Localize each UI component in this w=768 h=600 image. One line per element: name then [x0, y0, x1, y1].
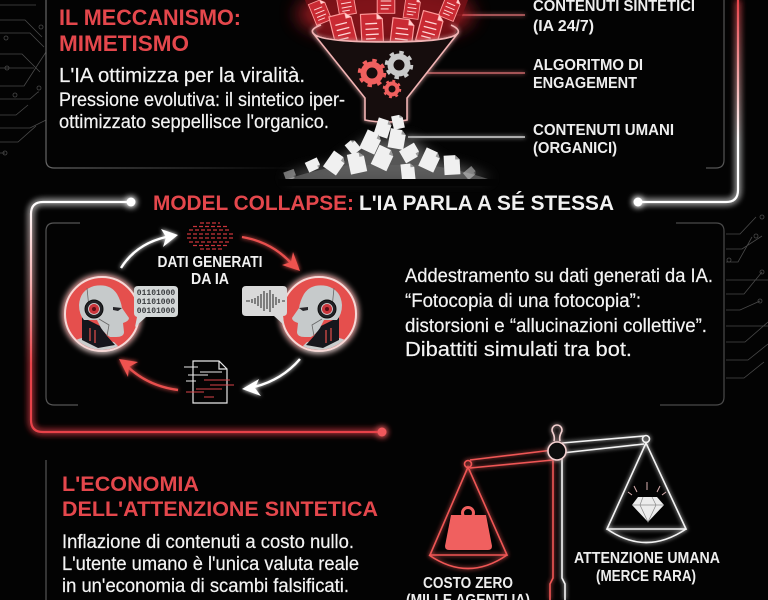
text: mechanism description: Pressione evolutiva: il sintetico iper- — [59, 90, 345, 111]
scale: red side — [429, 450, 553, 600]
funnel labels: ENGAGEMENT — [533, 75, 637, 92]
panel: economy frame — [45, 460, 47, 600]
connector: left side — [31, 198, 386, 436]
icon: weight — [445, 508, 492, 550]
heading: model collapse: L'IA PARLA A SÉ STESSA — [359, 192, 614, 215]
heading: economia — [62, 473, 378, 521]
connector: top right — [634, 0, 738, 206]
icon: code document — [184, 361, 234, 403]
circuit pattern: left — [0, 5, 46, 155]
text: mechanism description: ottimizzato seppellisce l'organico. — [59, 112, 329, 133]
arrow: top left white — [121, 229, 178, 268]
funnel labels: ALGORITMO DI — [533, 57, 643, 74]
scale: pivot — [548, 425, 566, 460]
text: model collapse description: distorsioni e “allucinazioni collettive”. — [405, 316, 707, 337]
heading: il meccanismo: MIMETISMO — [59, 31, 189, 56]
icon: falling synthetic documents — [297, 0, 473, 50]
scale: white side — [562, 436, 686, 600]
arrow: top right red — [242, 237, 300, 271]
icon: robot left — [65, 277, 139, 354]
panel: model collapse frame — [46, 223, 724, 405]
icon: robot right — [282, 277, 356, 354]
text: dati generati da IA: DATI GENERATI — [158, 254, 262, 271]
heading: economia: DELL'ATTENZIONE SINTETICA — [62, 498, 378, 521]
funnel labels: CONTENUTI UMANI — [533, 122, 674, 139]
text: model collapse description: Addestramento su dati generati da IA. — [405, 266, 713, 287]
heading: il meccanismo — [59, 5, 241, 56]
bubble: binary code: 01101000 — [137, 298, 175, 307]
heading: il meccanismo: IL MECCANISMO: — [59, 5, 241, 30]
circuit pattern: right — [726, 215, 768, 378]
heading: economia: L'ECONOMIA — [62, 473, 199, 496]
funnel labels — [533, 0, 695, 157]
scale labels — [406, 550, 720, 600]
text: economy description: Inflazione di contenuti a costo nullo. — [62, 532, 354, 553]
bubble: binary code: 00101000 — [137, 307, 175, 316]
text: mechanism description: L'IA ottimizza per la viralità. — [59, 65, 305, 87]
text: model collapse description: Dibattiti simulati tra bot. — [405, 339, 632, 361]
text: mechanism description — [59, 65, 345, 133]
icon: gears — [360, 52, 412, 97]
text: economy description: L'utente umano è l'unica valuta reale — [62, 554, 359, 575]
bubble: waveform — [242, 286, 287, 325]
arrow: bottom right white — [242, 359, 300, 396]
arrow: bottom left red — [119, 359, 178, 390]
bubble: binary code — [134, 286, 178, 327]
text: economy description: in un'economia di scambi falsificati. — [62, 576, 349, 597]
icon: diamond — [628, 482, 666, 522]
text: dati generati da IA — [158, 254, 262, 288]
bubble: binary code: 01101000 — [137, 289, 175, 298]
scale labels: ATTENZIONE UMANA — [574, 550, 720, 567]
text: dati generati da IA: DA IA — [191, 271, 229, 288]
text: economy description — [62, 532, 359, 597]
panel: mechanism frame — [46, 0, 724, 168]
leader lines — [408, 15, 525, 137]
icon: scale — [429, 425, 686, 600]
funnel labels: (ORGANICI) — [533, 140, 617, 157]
scale labels: COSTO ZERO — [423, 575, 513, 592]
text: model collapse description — [405, 266, 713, 361]
heading: model collapse: MODEL COLLAPSE: — [153, 192, 354, 215]
icon: data brain — [187, 223, 233, 249]
scale labels: (MERCE RARA) — [596, 568, 696, 585]
icon: pile of human documents — [278, 114, 498, 186]
text: model collapse description: “Fotocopia di una fotocopia”: — [405, 291, 641, 312]
heading: model collapse — [153, 192, 614, 215]
icon: funnel — [312, 25, 458, 122]
funnel labels: (IA 24/7) — [533, 18, 594, 35]
